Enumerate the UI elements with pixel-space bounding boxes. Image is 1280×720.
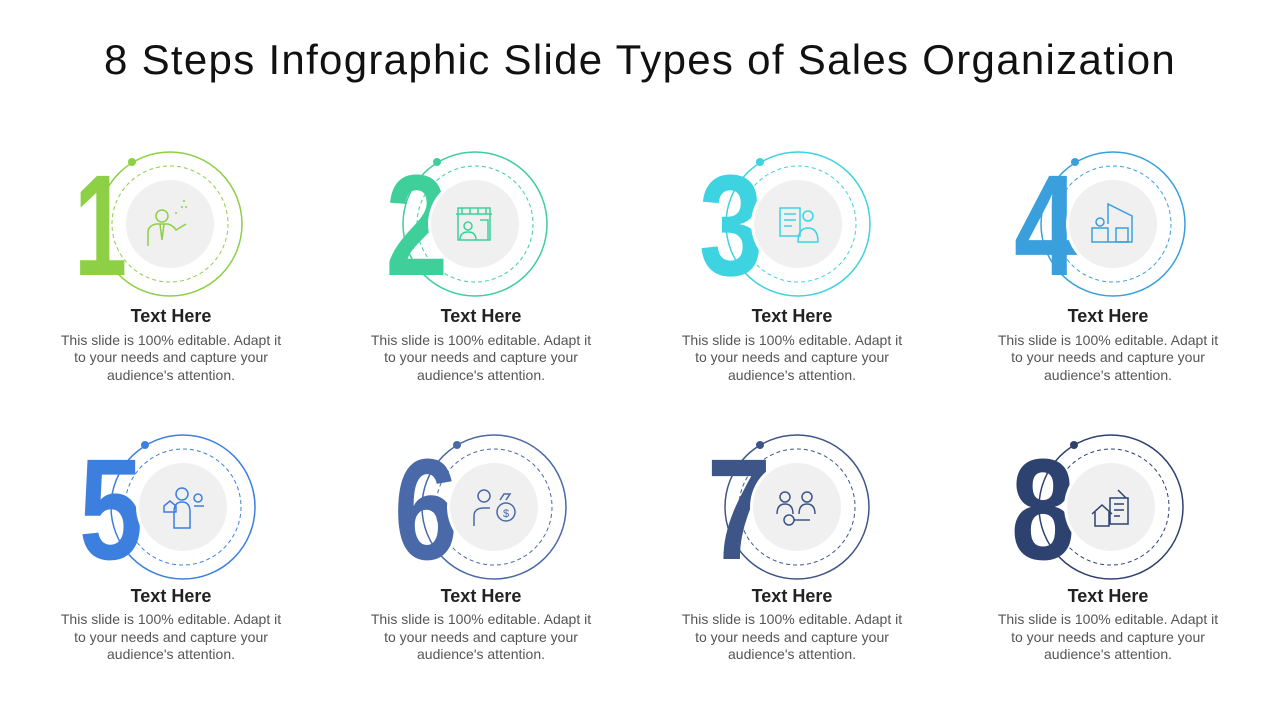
step 4: to your needs and capture your — [1011, 349, 1205, 365]
step 3: audience's attention. — [728, 367, 856, 383]
step 2: to your needs and capture your — [384, 349, 578, 365]
step 5: audience's attention. — [107, 646, 235, 662]
step 8: This slide is 100% editable. Adapt it — [998, 611, 1218, 627]
step 4: Text Here — [1068, 306, 1148, 326]
step 6 — [371, 429, 591, 662]
step 7: Text Here — [752, 586, 832, 606]
step 1: audience's attention. — [107, 367, 235, 383]
step 6: audience's attention. — [417, 646, 545, 662]
step 1: This slide is 100% editable. Adapt it — [61, 332, 281, 348]
icon: house with document — [1092, 490, 1128, 526]
step 5: Text Here — [131, 586, 211, 606]
step 2: Text Here — [441, 306, 521, 326]
step 4: This slide is 100% editable. Adapt it — [998, 332, 1218, 348]
title: 8 Steps Infographic Slide Types of Sales Organization — [104, 36, 1176, 83]
step 4: 4 — [1014, 145, 1078, 306]
step 4 — [998, 145, 1218, 383]
step 2: 2 — [386, 146, 448, 306]
step 3: Text Here — [752, 306, 832, 326]
icon: salesman — [148, 200, 186, 246]
step 3: This slide is 100% editable. Adapt it — [682, 332, 902, 348]
step 2: This slide is 100% editable. Adapt it — [371, 332, 591, 348]
step 4: audience's attention. — [1044, 367, 1172, 383]
step 6: 6 — [394, 429, 458, 590]
icon: man with money bag: $ — [503, 508, 509, 520]
step 6: This slide is 100% editable. Adapt it — [371, 611, 591, 627]
step 6: to your needs and capture your — [384, 629, 578, 645]
icon: man with money bag — [474, 490, 515, 526]
icon: person with house and key — [164, 488, 204, 528]
icon: shop — [456, 208, 492, 240]
step 3: 3 — [699, 145, 763, 306]
icon: building with person — [1092, 204, 1132, 242]
step 8: to your needs and capture your — [1011, 629, 1205, 645]
step 2: audience's attention. — [417, 367, 545, 383]
step 1 — [61, 145, 281, 383]
icon: document with person — [780, 208, 818, 242]
icon: two people with key — [777, 492, 815, 525]
step 8: audience's attention. — [1044, 646, 1172, 662]
step 7: to your needs and capture your — [695, 629, 889, 645]
step 2 — [371, 146, 591, 383]
step 6: Text Here — [441, 586, 521, 606]
step 8: Text Here — [1068, 586, 1148, 606]
step 7: This slide is 100% editable. Adapt it — [682, 611, 902, 627]
step 3 — [682, 145, 902, 383]
step 5: 5 — [79, 429, 143, 590]
step 8: 8 — [1011, 429, 1075, 590]
step 3: to your needs and capture your — [695, 349, 889, 365]
step 5: to your needs and capture your — [74, 629, 268, 645]
step 1: Text Here — [131, 306, 211, 326]
step 7: 7 — [707, 429, 771, 590]
step 1: 1 — [74, 145, 127, 306]
step 7 — [682, 429, 902, 662]
step 1: to your needs and capture your — [74, 349, 268, 365]
step 8 — [998, 429, 1218, 662]
step 7: audience's attention. — [728, 646, 856, 662]
step 5 — [61, 429, 281, 662]
step 5: This slide is 100% editable. Adapt it — [61, 611, 281, 627]
